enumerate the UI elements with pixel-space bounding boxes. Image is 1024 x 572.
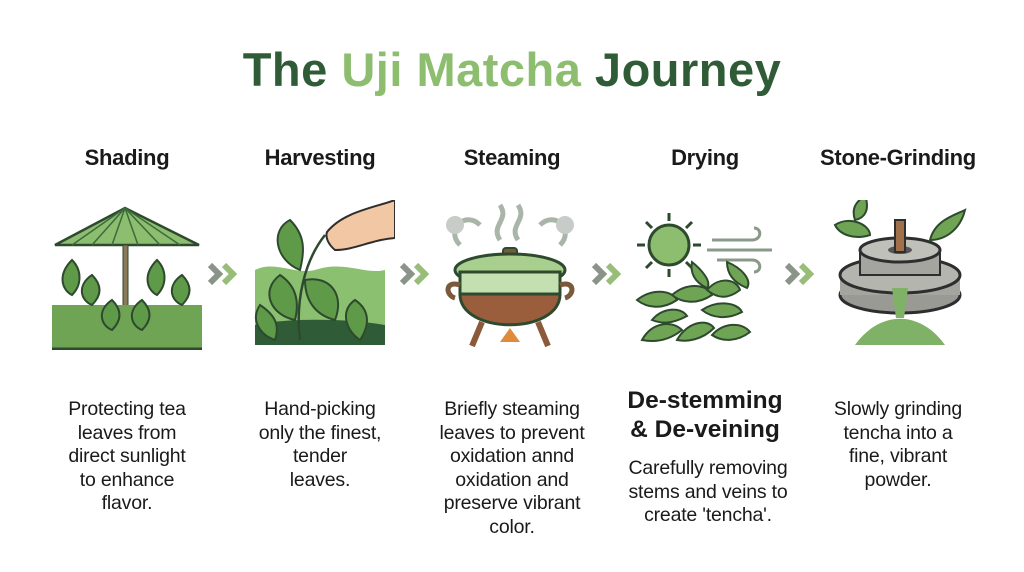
heading: shading: Shading <box>85 145 169 170</box>
icon: sun, wind and drying leaves <box>636 213 772 342</box>
heading: harvesting: Harvesting <box>265 145 375 170</box>
text: harvesting: Hand-picking <box>264 398 376 420</box>
text: steaming: oxidation and <box>455 468 569 490</box>
text: harvesting: only the finest, <box>259 422 381 444</box>
arrow 2 <box>400 263 430 285</box>
subheading: de-stemming <box>627 387 783 443</box>
text: stone-grinding: tencha into a <box>843 422 953 444</box>
icon: umbrella over tea plants <box>52 206 202 350</box>
text: shading: leaves from <box>78 422 176 444</box>
text: stone-grinding <box>834 398 962 490</box>
text: drying <box>628 457 787 526</box>
text: shading: to enhance <box>80 468 174 490</box>
icon: steaming pot <box>446 204 574 348</box>
icon: hand picking leaves <box>254 200 395 345</box>
text: drying: Carefully removing <box>629 457 787 479</box>
text: drying: create 'tencha'. <box>644 504 772 526</box>
text: steaming <box>439 398 585 538</box>
text: shading: direct sunlight <box>68 445 186 467</box>
text: shading: flavor. <box>102 492 152 514</box>
text: stone-grinding: powder. <box>865 468 931 490</box>
text: drying: stems and veins to <box>628 480 787 502</box>
text: stone-grinding: Slowly grinding <box>834 398 962 420</box>
text: harvesting: tender <box>293 445 347 467</box>
text: harvesting: leaves. <box>290 468 350 490</box>
heading: stone-grinding: Stone-Grinding <box>820 145 976 170</box>
text: shading <box>68 398 186 514</box>
heading: drying: Drying <box>671 145 739 170</box>
text: stone-grinding: fine, vibrant <box>849 445 947 467</box>
text: steaming: preserve vibrant <box>444 492 580 514</box>
text: shading: Protecting tea <box>68 398 186 420</box>
subheading: de-stemming: & De-veining <box>630 416 780 443</box>
subheading: de-stemming: De-stemming <box>627 387 783 414</box>
text: steaming: leaves to prevent <box>439 422 585 444</box>
arrow 4 <box>785 263 814 285</box>
text: steaming: color. <box>489 516 535 538</box>
text: steaming: oxidation annd <box>450 445 574 467</box>
arrow 3 <box>592 263 622 285</box>
icon: stone mill with matcha powder <box>834 200 966 345</box>
arrow 1 <box>208 263 238 285</box>
title: The Uji Matcha Journey <box>243 43 781 96</box>
heading: steaming: Steaming <box>464 145 560 170</box>
text: steaming: Briefly steaming <box>444 398 580 420</box>
text: harvesting <box>259 398 381 490</box>
